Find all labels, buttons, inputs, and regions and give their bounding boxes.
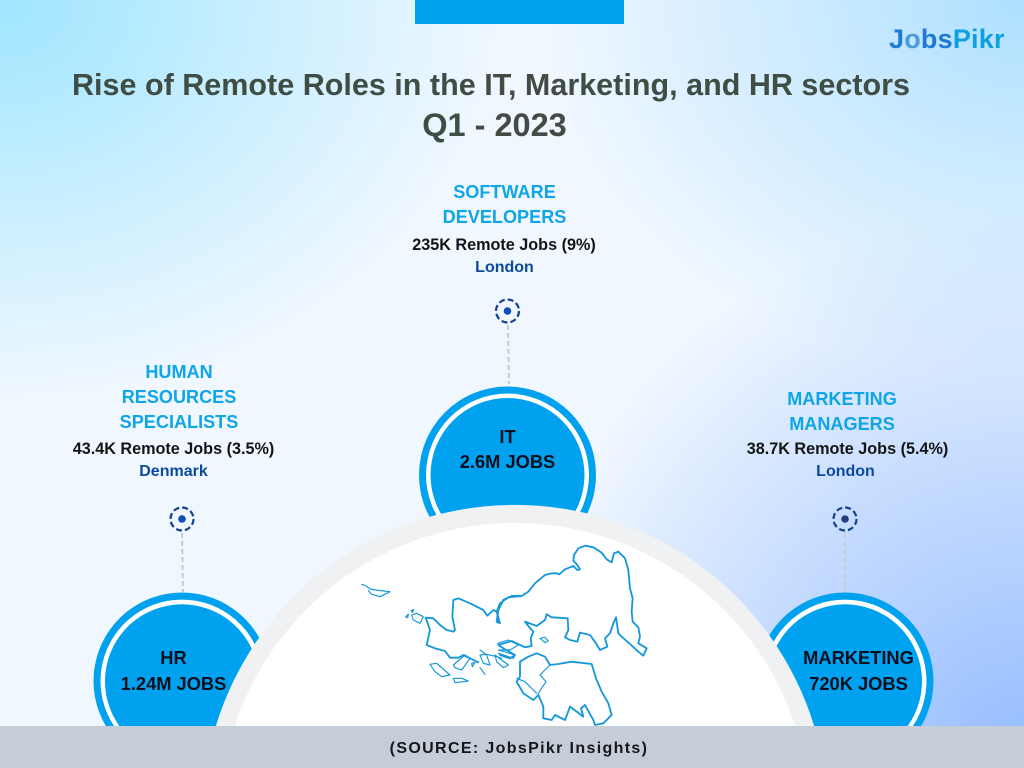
source footer — [0, 726, 1024, 768]
label: marketing jobs: MARKETING — [803, 647, 914, 668]
title — [72, 68, 910, 143]
label: HR jobs: HR — [160, 647, 187, 668]
logo: JobsPikr: JobsPikr — [889, 24, 1005, 54]
map outline — [362, 546, 647, 725]
top accent bar — [415, 0, 624, 24]
icon: marketing marker and connector — [834, 508, 856, 592]
panel: software developers callout: DEVELOPERS — [443, 207, 566, 227]
panel: marketing managers callout: 38.7K Remote Jobs (5.4%) — [747, 440, 948, 458]
label: HR jobs — [121, 647, 226, 694]
title: Rise of Remote Roles in the IT, Marketing, and HR sectors — [72, 68, 910, 102]
panel: HR specialists callout: 43.4K Remote Jobs (3.5%) — [73, 440, 274, 458]
icon: HR marker and connector — [170, 508, 194, 592]
icon: IT marker and connector — [496, 300, 519, 384]
label: IT jobs: IT — [499, 426, 516, 447]
label: HR jobs: 1.24M JOBS — [121, 673, 226, 694]
panel: marketing circle — [757, 592, 934, 726]
source footer: (SOURCE: JobsPikr Insights) — [390, 740, 648, 757]
panel: marketing managers callout: MARKETING — [787, 389, 897, 409]
panel: software developers callout: London — [475, 259, 534, 276]
panel: HR specialists callout — [73, 362, 274, 480]
panel: HR specialists callout: SPECIALISTS — [120, 412, 238, 432]
label: marketing jobs — [803, 647, 914, 694]
title: Q1 - 2023 — [422, 107, 567, 143]
panel: HR circle — [94, 592, 270, 726]
panel: marketing managers callout: MANAGERS — [789, 414, 895, 434]
panel: marketing managers callout — [747, 389, 948, 480]
label: marketing jobs: 720K JOBS — [809, 673, 908, 694]
panel: software developers callout — [412, 182, 596, 276]
panel: HR specialists callout: HUMAN — [145, 362, 213, 382]
central arch — [216, 505, 814, 726]
panel: marketing managers callout: London — [816, 463, 875, 480]
panel: HR specialists callout: Denmark — [139, 463, 208, 480]
panel: software developers callout: SOFTWARE — [453, 182, 556, 202]
panel: IT circle — [419, 386, 596, 564]
label: IT jobs: 2.6M JOBS — [460, 451, 555, 472]
panel: software developers callout: 235K Remote Jobs (9%) — [412, 236, 596, 254]
panel: HR specialists callout: RESOURCES — [122, 387, 236, 407]
label: IT jobs — [460, 426, 555, 472]
